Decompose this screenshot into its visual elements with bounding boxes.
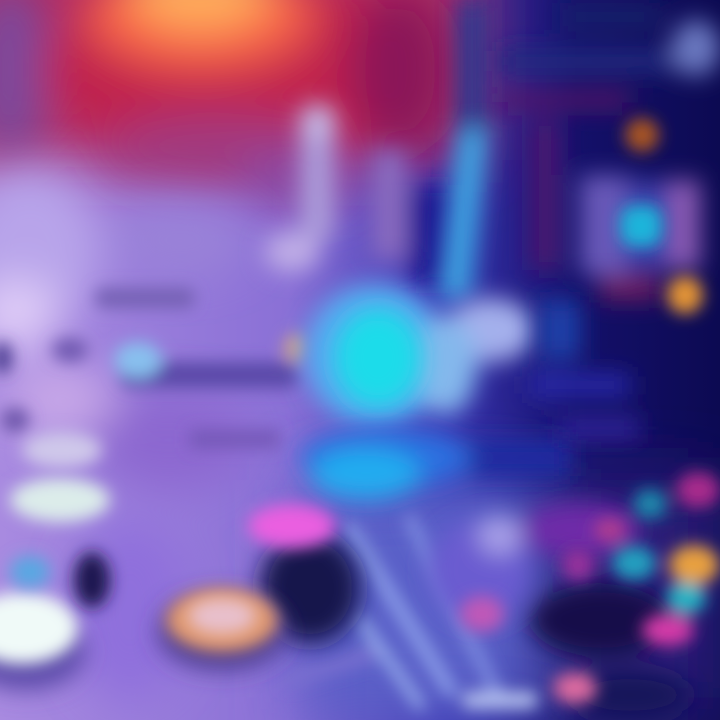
panel: upper right screen: [500, 10, 720, 314]
pink dish: [248, 504, 360, 643]
blue stem: [438, 0, 490, 300]
lavender floor: left side: [0, 170, 250, 700]
cyan orb: [303, 283, 535, 427]
orange dish: [158, 588, 286, 670]
cyan base: [300, 428, 570, 500]
violet streaks: right centre: [530, 300, 640, 436]
dark bands: mid left: [0, 288, 308, 448]
top glow: orange sunset: [0, 0, 450, 210]
pale columns: centre: [264, 104, 456, 285]
white dishes: lower left: [0, 432, 110, 690]
swirl: lower right colour patches: [430, 472, 720, 719]
light streaks: bottom centre: [290, 520, 530, 705]
